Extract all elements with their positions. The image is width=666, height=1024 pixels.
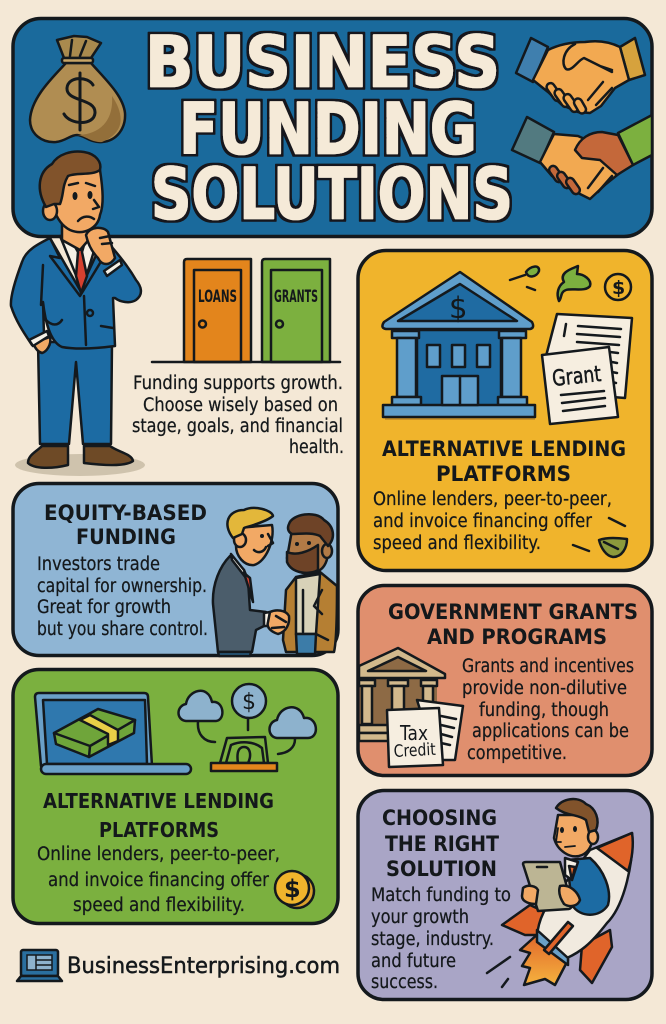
body text xyxy=(371,885,511,993)
body text: speed and flexibility. xyxy=(373,533,541,554)
heading: ALTERNATIVE LENDING xyxy=(382,437,626,462)
body text: Match funding to xyxy=(371,885,511,906)
icon: tax credit documents: Credit xyxy=(393,740,436,762)
panel: alternative lending platforms (green) xyxy=(13,670,338,924)
body text xyxy=(37,554,208,640)
icon: money bag xyxy=(30,36,125,142)
shoes xyxy=(28,446,68,468)
heading xyxy=(44,501,207,550)
panel: choosing the right solution (purple) xyxy=(358,790,652,1000)
body text: your growth xyxy=(371,907,469,928)
text block: intro: health. xyxy=(289,437,344,458)
text block: intro: Funding supports growth. xyxy=(133,373,343,394)
left man xyxy=(213,556,268,652)
neck and head xyxy=(62,215,92,250)
title: SOLUTIONS xyxy=(151,154,513,236)
heading xyxy=(388,600,638,650)
panel: equity-based funding (blue) xyxy=(13,484,338,656)
left hand and cuff xyxy=(33,337,50,353)
heading xyxy=(382,437,626,487)
body text xyxy=(462,656,634,764)
body text: funding, though xyxy=(479,700,609,721)
icon: laptop logo xyxy=(17,950,62,981)
footer: site logo and name: BusinessEnterprising.com xyxy=(67,953,340,979)
footer: site logo and name xyxy=(17,950,340,981)
icon: loans and grants doors xyxy=(152,259,340,362)
shirt and tie xyxy=(60,236,98,290)
heading xyxy=(382,806,499,882)
jacket xyxy=(11,238,141,349)
icon: bottom handshake xyxy=(512,115,652,199)
icon: tax credit documents: Tax xyxy=(399,721,428,745)
panel: government grants and programs (salmon) xyxy=(358,586,652,776)
icon: gold coins xyxy=(275,871,314,908)
icon: government building xyxy=(359,648,445,741)
icon: top handshake xyxy=(516,38,645,115)
body text: Investors trade xyxy=(37,554,160,575)
body text: Online lenders, peer-to-peer, xyxy=(37,844,280,865)
raised hand and cuff xyxy=(86,228,115,264)
body text: capital for ownership. xyxy=(37,576,207,597)
trousers xyxy=(38,342,112,444)
title: BUSINESS xyxy=(145,22,500,104)
body text: competitive. xyxy=(467,743,567,764)
body text: and invoice financing offer xyxy=(373,511,592,532)
heading: GOVERNMENT GRANTS xyxy=(388,600,638,625)
body text: and future xyxy=(371,951,456,972)
panel: header banner xyxy=(13,18,652,236)
motion lines xyxy=(487,957,510,987)
body text: but you share control. xyxy=(37,619,208,640)
text block: intro: stage, goals, and financial xyxy=(132,416,343,437)
head xyxy=(554,815,594,856)
heading: ALTERNATIVE LENDING xyxy=(43,789,274,813)
body text: Great for growth xyxy=(37,597,171,618)
icon: tax credit documents xyxy=(387,700,463,767)
heading: SOLUTION xyxy=(386,857,497,882)
grants door xyxy=(262,259,330,362)
body text: Grants and incentives xyxy=(462,656,634,677)
icon: gold coins: $ xyxy=(284,875,301,903)
heading: THE RIGHT xyxy=(385,832,499,857)
fins xyxy=(502,905,545,935)
right man xyxy=(283,572,337,652)
illustration: two people shaking hands xyxy=(213,508,337,656)
body text: Online lenders, peer-to-peer, xyxy=(373,489,612,510)
suit and tie xyxy=(567,858,609,915)
shadow xyxy=(15,454,145,476)
icon: grant documents: Grant xyxy=(551,362,603,392)
icon: grant documents xyxy=(542,314,632,424)
flame xyxy=(520,932,568,985)
tablet and hands xyxy=(523,862,572,911)
grants door: GRANTS xyxy=(274,287,318,307)
icon: clouds, dollar and lending kiosk: $ xyxy=(242,690,256,715)
body text xyxy=(37,844,280,916)
body text: provide non-dilutive xyxy=(462,678,627,699)
title xyxy=(145,22,513,236)
heading xyxy=(43,789,274,842)
loans door xyxy=(184,259,251,362)
body text: success. xyxy=(371,972,438,993)
text block: intro: Choose wisely based on xyxy=(143,395,338,416)
title: FUNDING xyxy=(179,88,477,170)
icons: doodles and dollar coin: $ xyxy=(612,277,625,299)
heading: CHOOSING xyxy=(382,806,497,831)
heading: EQUITY-BASED xyxy=(44,501,207,526)
rocket body xyxy=(537,833,632,958)
clasped hands xyxy=(264,612,270,626)
heading: PLATFORMS xyxy=(436,462,571,487)
heading: AND PROGRAMS xyxy=(427,625,607,650)
body text xyxy=(373,489,612,554)
illustration: businessman on rocket xyxy=(487,799,633,987)
text block: intro xyxy=(132,373,344,458)
body text: and invoice financing offer xyxy=(48,870,269,891)
icons: doodles and dollar coin xyxy=(510,266,631,557)
loans door: LOANS xyxy=(198,287,237,307)
icon: bank xyxy=(382,272,535,420)
heading: PLATFORMS xyxy=(99,818,219,842)
body text: speed and flexibility. xyxy=(73,895,245,916)
icon: laptop with cash xyxy=(35,693,191,774)
body text: stage, industry. xyxy=(371,929,494,950)
body text: applications can be xyxy=(472,721,629,742)
illustration: thinking businessman xyxy=(11,152,145,476)
heading: FUNDING xyxy=(76,525,176,550)
panel: alternative lending platforms (yellow) xyxy=(358,250,652,570)
icon: clouds, dollar and lending kiosk xyxy=(178,684,316,771)
icon: bank: $ xyxy=(449,291,467,325)
